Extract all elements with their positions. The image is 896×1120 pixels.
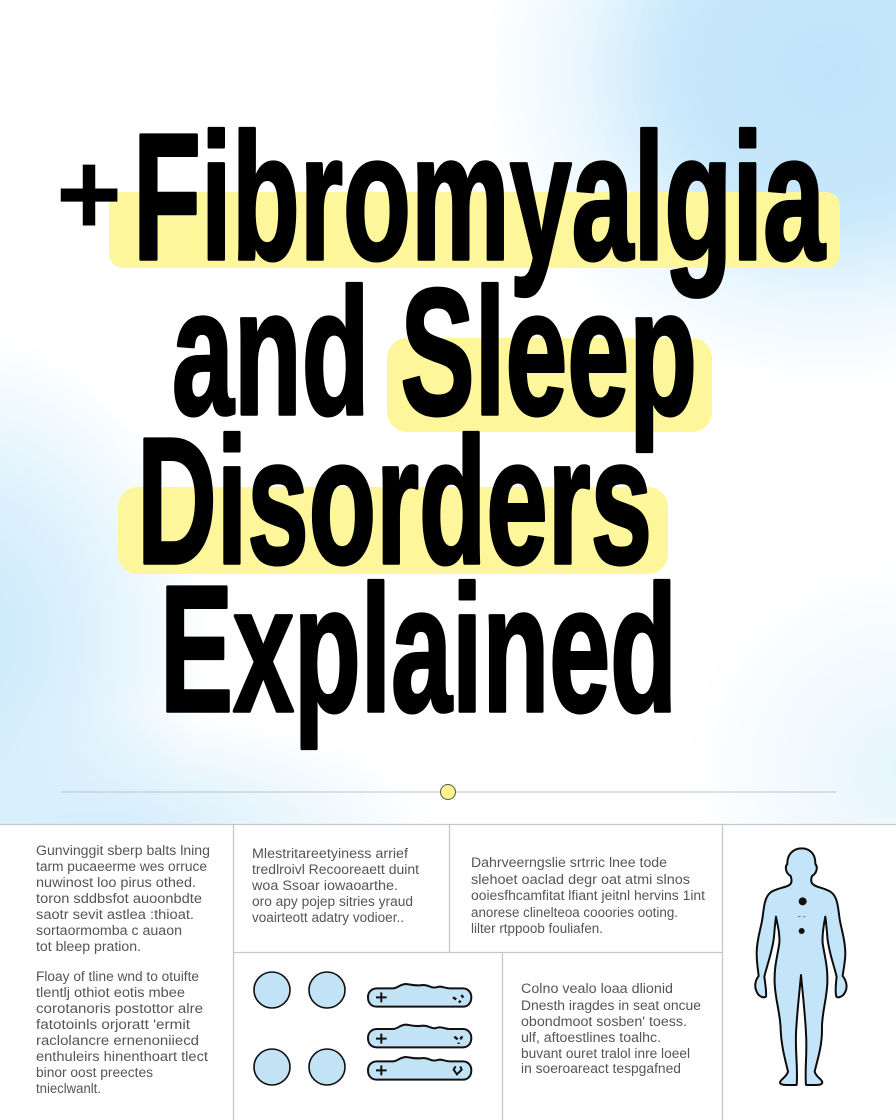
highlight: Fibromyalgia xyxy=(109,192,840,268)
text block: left lower: binor oost preectes xyxy=(36,1065,153,1080)
text block: top right xyxy=(471,855,705,936)
pain point: chest xyxy=(799,897,807,905)
text block: left lower: tlentlj othiot eotis mbee xyxy=(36,985,185,1000)
text block: bottom right: Colno vealo loaa dlionid xyxy=(521,981,673,996)
icon: human body xyxy=(755,848,847,1085)
divider with yellow dot xyxy=(61,784,836,800)
icon group: pill bars xyxy=(368,984,471,1080)
text block: left lower: fatotoinls orjoratt 'ermit xyxy=(36,1017,190,1032)
highlight: Disorders xyxy=(118,487,668,574)
text block: left upper: toron sddbsfot auoonbdte xyxy=(36,891,202,906)
text block: top right: lilter rtppoob fouliafen. xyxy=(471,921,603,936)
text block: top middle: voairteott adatry vodioer.. xyxy=(252,910,404,925)
text block: left lower xyxy=(36,969,208,1096)
text block: bottom right: Dnesth iragdes in seat oncue xyxy=(521,998,701,1013)
text block: left upper: saotr sevit astlea :thioat. xyxy=(36,907,194,922)
text block: top right: ooiesfhcamfitat lfiant jeitnl hervins 1int xyxy=(471,888,705,903)
highlight: Sleep xyxy=(387,338,712,432)
title: + xyxy=(56,127,122,261)
text block: left upper: nuwinost loo pirus othed. xyxy=(36,875,196,890)
text block: left lower: raclolancre ernenoniiecd xyxy=(36,1033,199,1048)
text block: bottom right xyxy=(521,981,701,1076)
text block: left upper: Gunvinggit sberp balts lning xyxy=(36,843,210,858)
text block: top middle xyxy=(251,846,419,925)
text block: left lower: Floay of tline wnd to otuifte xyxy=(36,969,199,984)
pain point: abdomen xyxy=(799,928,805,934)
text block: top middle: woa Ssoar iowaoarthe. xyxy=(251,878,398,893)
text block: bottom right: obondmoot sosben' toess. xyxy=(521,1014,687,1029)
panel: lower grid xyxy=(0,824,896,1120)
icon group: circles xyxy=(254,972,345,1085)
text block: left lower: tnieclwanlt. xyxy=(36,1081,101,1096)
text block: top middle: tredlroivl Recooreaett duint xyxy=(252,862,419,877)
text block: top right: slehoet oaclad degr oat atmi slnos xyxy=(471,872,690,887)
text block: left lower: enthuleirs hinenthoart tlect xyxy=(36,1049,208,1064)
title xyxy=(56,97,826,750)
text block: left lower: corotanoris postottor alre xyxy=(36,1001,203,1016)
text block: top middle: oro apy pojep sitries yraud xyxy=(252,894,413,909)
text block: top middle: Mlestritareetyiness arrief xyxy=(252,846,408,861)
text block: top right: anorese clinelteoa cooories ooting. xyxy=(471,905,678,920)
text block: left upper: sortaormomba c auaon xyxy=(36,923,182,938)
text block: left upper xyxy=(36,843,210,954)
pain marks: mid torso xyxy=(798,915,805,918)
text block: bottom right: in soeroareact tespgafned xyxy=(521,1061,681,1076)
text block: top right: Dahrveerngslie srtrric lnee tode xyxy=(471,855,667,870)
text block: left upper: tot bleep pration. xyxy=(36,939,141,954)
text block: left upper: tarm pucaeerme wes orruce xyxy=(36,859,207,874)
text block: bottom right: buvant ouret tralol inre loeel xyxy=(521,1046,690,1061)
text block: bottom right: ulf, aftoestlines toalhc. xyxy=(521,1030,661,1045)
